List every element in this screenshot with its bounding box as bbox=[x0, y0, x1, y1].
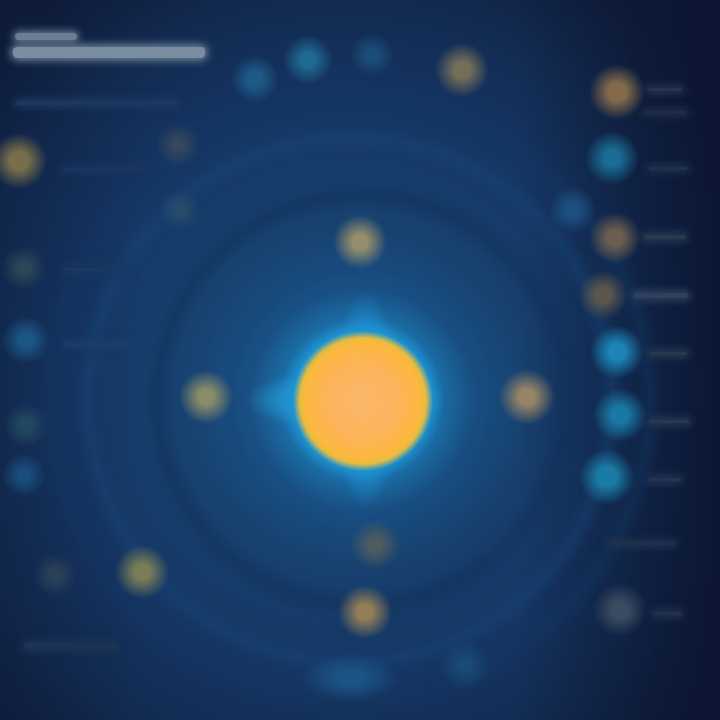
title bbox=[6, 26, 212, 66]
item 3 icon bbox=[589, 212, 641, 264]
planet: right bbox=[499, 369, 555, 425]
bottom icons bbox=[308, 648, 482, 698]
item 7 text bbox=[649, 478, 681, 481]
item 3 text bbox=[644, 235, 686, 239]
left column bbox=[0, 134, 126, 651]
item 8 text bbox=[609, 542, 675, 545]
icon: bottom blue bbox=[300, 654, 400, 702]
planet: left faint bbox=[160, 190, 200, 230]
title line 2 bbox=[13, 47, 205, 58]
icon: left 4 bbox=[4, 403, 48, 447]
right column list bbox=[552, 66, 692, 634]
icon: left 5 bbox=[2, 453, 46, 497]
item 2 text bbox=[649, 167, 687, 170]
subtitle bbox=[16, 101, 178, 105]
icon: left tan bbox=[0, 133, 47, 189]
item 6 icon bbox=[593, 388, 647, 442]
item 1 text bbox=[648, 88, 682, 91]
item 9 text bbox=[654, 612, 681, 615]
planet: left bbox=[179, 370, 233, 424]
planet: upper left faint bbox=[156, 123, 200, 167]
text bar 1 bbox=[64, 168, 146, 171]
item 1 text line 2 bbox=[644, 111, 686, 114]
item 7 icon bbox=[579, 449, 635, 505]
icon: faint blue bbox=[548, 186, 596, 234]
item 1 icon bbox=[589, 64, 645, 120]
icon: bottom right blue bbox=[440, 640, 490, 690]
item 4 text bbox=[634, 293, 688, 298]
item 4 icon bbox=[578, 270, 628, 320]
planet: lower bbox=[350, 520, 400, 570]
text bar 2 bbox=[64, 268, 126, 271]
item 6 text bbox=[649, 420, 689, 423]
icon: blue 2 bbox=[283, 35, 333, 85]
planet: top bbox=[333, 215, 387, 269]
icon: blue 1 bbox=[231, 55, 279, 103]
planet: bottom bbox=[338, 585, 392, 639]
icon: left 3 bbox=[2, 316, 50, 364]
planet: lower left bbox=[115, 545, 169, 599]
item 2 icon bbox=[585, 131, 639, 185]
item 5 icon bbox=[590, 325, 644, 379]
item 9 icon bbox=[593, 583, 647, 637]
title line 1 bbox=[15, 33, 77, 40]
item 5 text bbox=[649, 352, 687, 355]
icon: blue 3 bbox=[350, 33, 394, 77]
text bar 3 bbox=[64, 343, 126, 346]
icon: left 2 bbox=[2, 246, 46, 290]
sun bbox=[293, 331, 433, 471]
icon: left 6 bbox=[33, 553, 77, 597]
icon: tan bbox=[435, 43, 489, 97]
text bar 4 bbox=[24, 643, 116, 649]
